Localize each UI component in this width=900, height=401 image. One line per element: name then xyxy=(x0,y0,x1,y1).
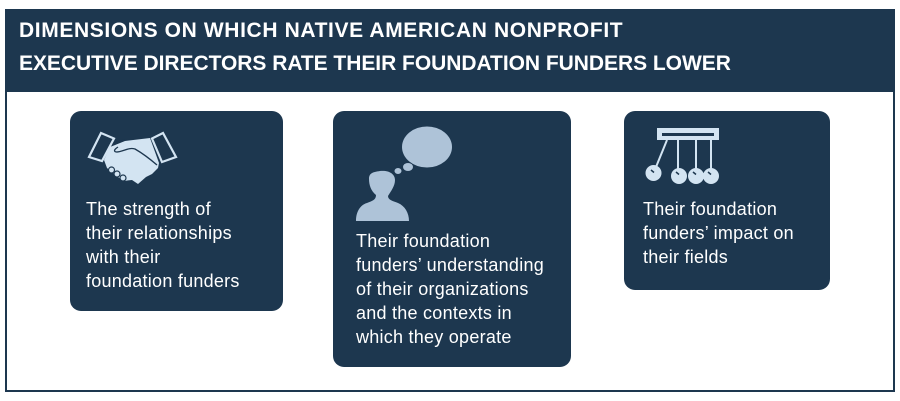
text: relationships: foundation funders xyxy=(86,271,240,291)
icon: newton's cradle xyxy=(646,128,719,184)
panel: relationships xyxy=(70,111,283,311)
text: impact: their fields xyxy=(643,247,728,267)
text: understanding: of their organizations xyxy=(356,279,529,299)
text: relationships: The strength of xyxy=(86,199,211,219)
text: understanding: Their foundation xyxy=(356,231,490,251)
panel: understanding xyxy=(333,111,571,367)
icon: person with thought bubble xyxy=(356,126,452,221)
text: impact xyxy=(643,199,794,267)
title xyxy=(19,19,731,75)
title: EXECUTIVE DIRECTORS RATE THEIR FOUNDATION FUNDERS LOWER xyxy=(19,52,731,75)
text: impact: Their foundation xyxy=(643,199,777,219)
icon: handshake xyxy=(88,132,178,184)
text: relationships xyxy=(86,199,240,291)
text: understanding: and the contexts in xyxy=(356,303,512,323)
text: understanding: funders’ understanding xyxy=(356,255,544,275)
text: understanding xyxy=(356,231,544,347)
text: relationships: with their xyxy=(86,247,161,267)
title: DIMENSIONS ON WHICH NATIVE AMERICAN NONPROFIT xyxy=(19,19,623,42)
panel: impact xyxy=(624,111,830,290)
text: understanding: which they operate xyxy=(356,327,512,347)
text: relationships: their relationships xyxy=(86,223,232,243)
text: impact: funders’ impact on xyxy=(643,223,794,243)
title banner xyxy=(5,9,895,92)
